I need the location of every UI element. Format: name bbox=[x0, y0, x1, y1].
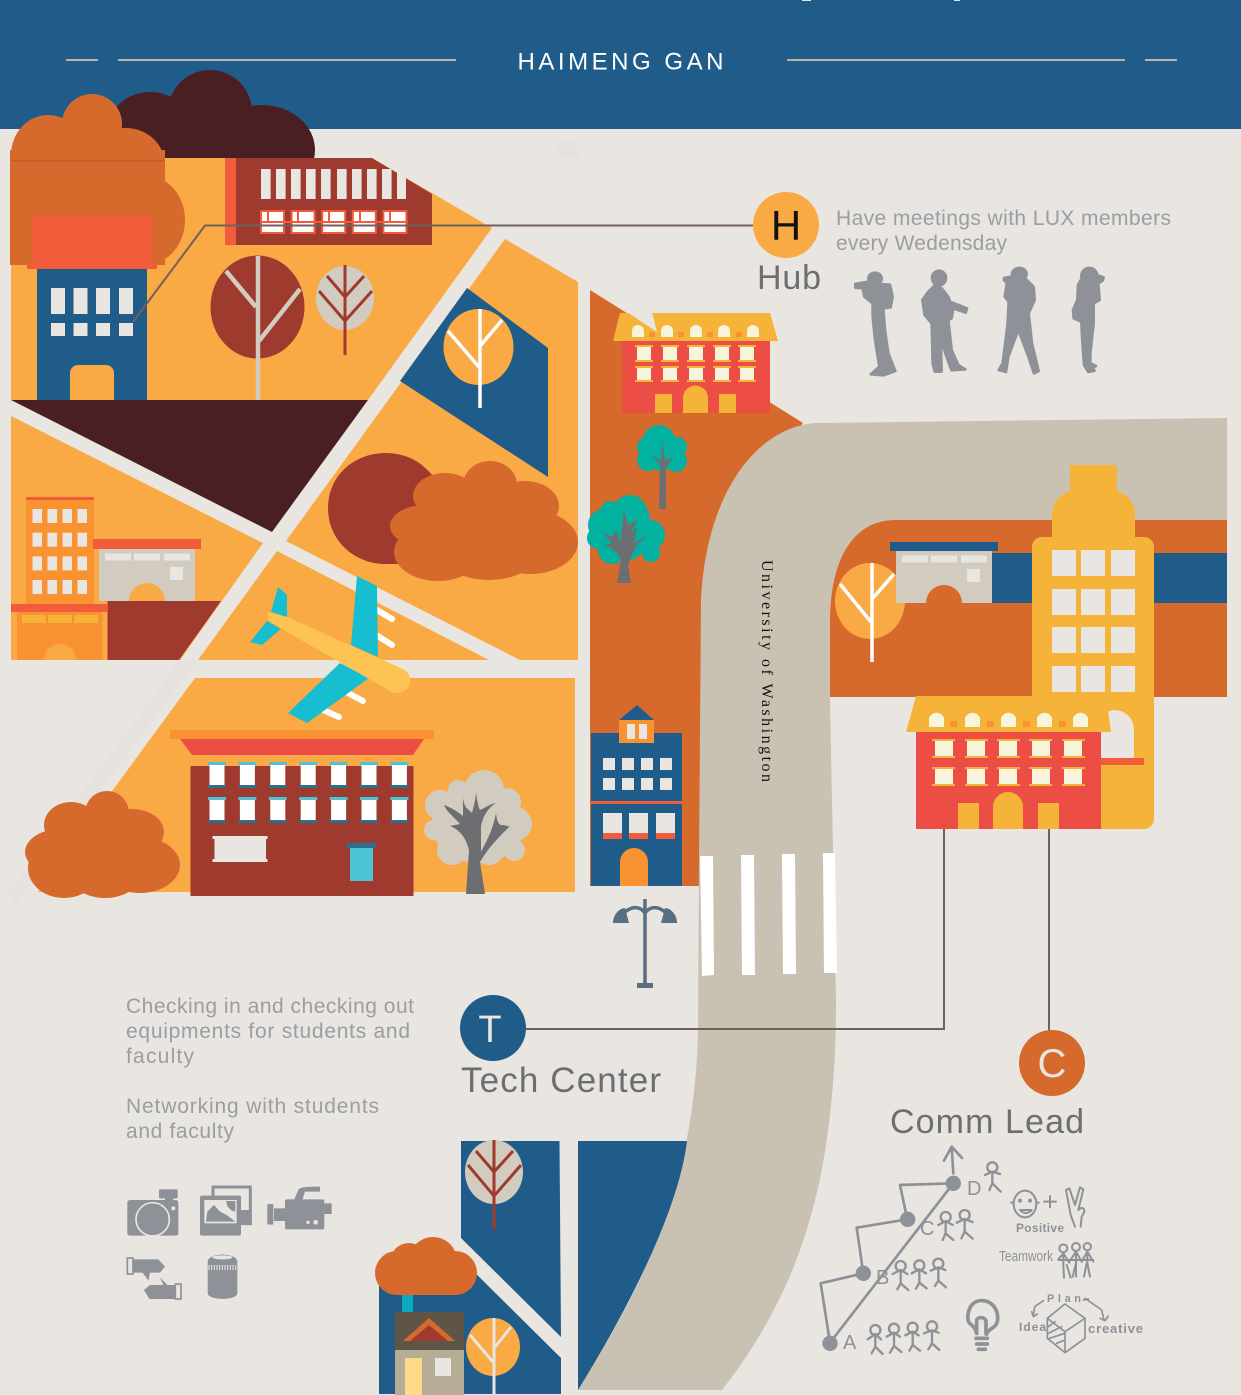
Tech Center description bbox=[126, 995, 414, 1143]
Comm Lead marker: C bbox=[1038, 1042, 1066, 1086]
sketch labels: A bbox=[843, 1332, 857, 1354]
bushes: brown and orange bbox=[328, 453, 578, 581]
sketch labels: Idea bbox=[1019, 1320, 1046, 1334]
icon: lens bbox=[208, 1255, 237, 1299]
building: brown hall bbox=[225, 158, 432, 245]
sketch labels: D bbox=[967, 1178, 981, 1200]
Hub marker: H bbox=[771, 202, 801, 249]
photographer silhouettes bbox=[855, 268, 1104, 375]
Tech Center heading: Tech Center bbox=[461, 1061, 661, 1100]
Hub marker bbox=[753, 192, 819, 258]
building: red hall right bbox=[906, 696, 1111, 829]
Comm Lead heading: Comm Lead bbox=[890, 1103, 1084, 1141]
sketch labels bbox=[843, 1178, 1143, 1354]
road label: University of Washington bbox=[758, 560, 775, 782]
connector: Comm Lead bbox=[1048, 829, 1050, 1032]
cover below dark cloud bbox=[165, 158, 372, 196]
connector: Hub bbox=[133, 226, 753, 322]
central orange area bbox=[590, 290, 803, 886]
sketch: smiley and peace hand bbox=[1011, 1187, 1084, 1227]
tree: grey with bare trunk bbox=[424, 770, 532, 894]
road bbox=[578, 418, 1227, 1390]
Tech Center description: and faculty bbox=[126, 1120, 234, 1143]
bottom blue blocks bbox=[379, 1141, 687, 1394]
sketch: plan cube bbox=[1032, 1298, 1108, 1353]
Tech Center description: Checking in and checking out bbox=[126, 995, 414, 1018]
icon: photos bbox=[200, 1187, 252, 1236]
icon: paired camcorders bbox=[127, 1258, 181, 1299]
Tech Center marker: T bbox=[478, 1009, 502, 1051]
tree: grey on blue bbox=[465, 1140, 523, 1230]
street lamp bbox=[613, 899, 677, 988]
house with orange tree bbox=[375, 1237, 520, 1395]
camera icons bbox=[127, 1187, 332, 1299]
tree: teal small bbox=[637, 425, 687, 509]
sketch labels: Teamwork bbox=[999, 1248, 1053, 1265]
sketch labels: C bbox=[920, 1218, 934, 1240]
Hub description: Have meetings with LUX members bbox=[836, 207, 1171, 230]
cloud tree: orange bbox=[10, 94, 185, 265]
sketch: stick figures bbox=[868, 1162, 1001, 1354]
tree: orange on blue bbox=[444, 309, 514, 408]
building: blue townhouse bbox=[591, 705, 682, 886]
tree: small grey bbox=[316, 265, 374, 355]
sketch labels: B bbox=[876, 1267, 889, 1289]
title: HAIMENG GAN bbox=[518, 48, 724, 76]
sketch labels: creative bbox=[1088, 1321, 1143, 1336]
tree: orange on right lot bbox=[835, 563, 905, 662]
icon: camera bbox=[127, 1189, 178, 1236]
building: blue tower with red roof bbox=[27, 215, 157, 400]
header band bbox=[0, 0, 1241, 129]
connector: Tech Center bbox=[526, 829, 944, 1029]
tree: teal large bbox=[587, 495, 665, 583]
map blocks: left side bbox=[11, 138, 580, 892]
Comm Lead marker bbox=[1019, 1030, 1085, 1096]
cloud tree: dark bbox=[108, 70, 315, 195]
Tech Center description: Networking with students bbox=[126, 1095, 379, 1118]
Tech Center marker bbox=[460, 995, 526, 1061]
sketch labels: Plan bbox=[1047, 1293, 1081, 1305]
building: grey with navy roof bbox=[890, 542, 998, 603]
building: red hall on central lot bbox=[613, 312, 778, 413]
building: yellow tower bbox=[1032, 465, 1154, 829]
sketch: teamwork figures bbox=[1058, 1243, 1093, 1278]
buildings: lower left cluster bbox=[11, 497, 221, 660]
crosswalk bbox=[700, 853, 837, 976]
sketch: light bulb bbox=[968, 1301, 998, 1349]
faint road strip bbox=[6, 660, 198, 905]
sketch: ladder chart bbox=[821, 1147, 962, 1351]
bush: bottom left bbox=[25, 791, 180, 898]
Tech Center description: equipments for students and bbox=[126, 1020, 410, 1043]
tree: large brown bbox=[210, 256, 304, 400]
Hub description bbox=[836, 207, 1171, 255]
right orange area bbox=[830, 520, 1227, 697]
Hub description: every Wedensday bbox=[836, 232, 1008, 255]
airplane bbox=[250, 576, 410, 723]
building: long brown hall bbox=[170, 730, 434, 896]
icon: video camera bbox=[267, 1187, 332, 1229]
Tech Center description: faculty bbox=[126, 1045, 194, 1068]
Hub heading: Hub bbox=[757, 259, 821, 297]
leadership sketch bbox=[821, 1147, 1108, 1354]
sketch labels: Positive bbox=[1016, 1221, 1064, 1235]
